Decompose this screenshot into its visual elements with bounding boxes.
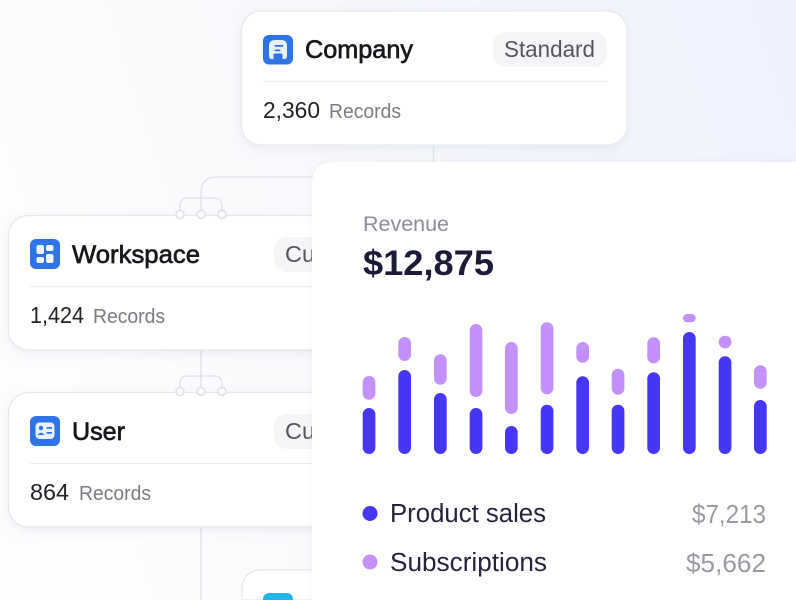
records: user: Records	[79, 482, 151, 505]
legend: product sales	[362, 499, 766, 529]
value: total revenue: $12,875	[363, 244, 494, 283]
records: company: Records	[329, 100, 401, 123]
records: company: 2,360	[263, 97, 320, 123]
icon: user id card	[30, 416, 60, 446]
bar chart: product sales and subscriptions	[363, 314, 767, 454]
icon: workspace grid	[30, 239, 60, 269]
heading: User: User	[72, 418, 125, 446]
badge: Standard	[493, 32, 607, 67]
connectors between cards	[180, 145, 434, 600]
series: subscriptions	[363, 314, 767, 414]
icon: bottom card	[263, 593, 293, 600]
connector nodes	[176, 210, 226, 396]
records: workspace: Records	[93, 305, 165, 328]
badge: Custom, clipped	[274, 237, 388, 272]
card: bottom partial	[242, 570, 330, 600]
legend: product sales: Product sales	[390, 500, 546, 528]
badge: Custom, clipped: Cu	[285, 418, 315, 444]
card: User	[8, 392, 408, 527]
badge: Custom, clipped: Cu	[285, 241, 315, 267]
records: company	[263, 97, 401, 123]
series: product sales	[363, 332, 767, 454]
icon: company building	[263, 35, 293, 64]
legend: product sales: $7,213	[692, 499, 766, 529]
label: Revenue: Revenue	[363, 212, 449, 236]
legend: subscriptions: $5,662	[686, 548, 766, 578]
badge: Standard: Standard	[504, 36, 595, 62]
records: workspace: 1,424	[30, 302, 84, 328]
records: user	[30, 479, 151, 505]
card: Workspace	[8, 216, 408, 350]
legend: subscriptions	[362, 548, 766, 578]
records: user: 864	[30, 479, 69, 505]
records: workspace	[30, 302, 165, 328]
badge: Custom, clipped	[274, 414, 388, 449]
panel: revenue	[312, 162, 796, 600]
heading: Workspace: Workspace	[72, 241, 200, 269]
legend: subscriptions: Subscriptions	[390, 549, 547, 577]
card: Company	[242, 11, 627, 145]
heading: Company: Company	[305, 36, 413, 64]
